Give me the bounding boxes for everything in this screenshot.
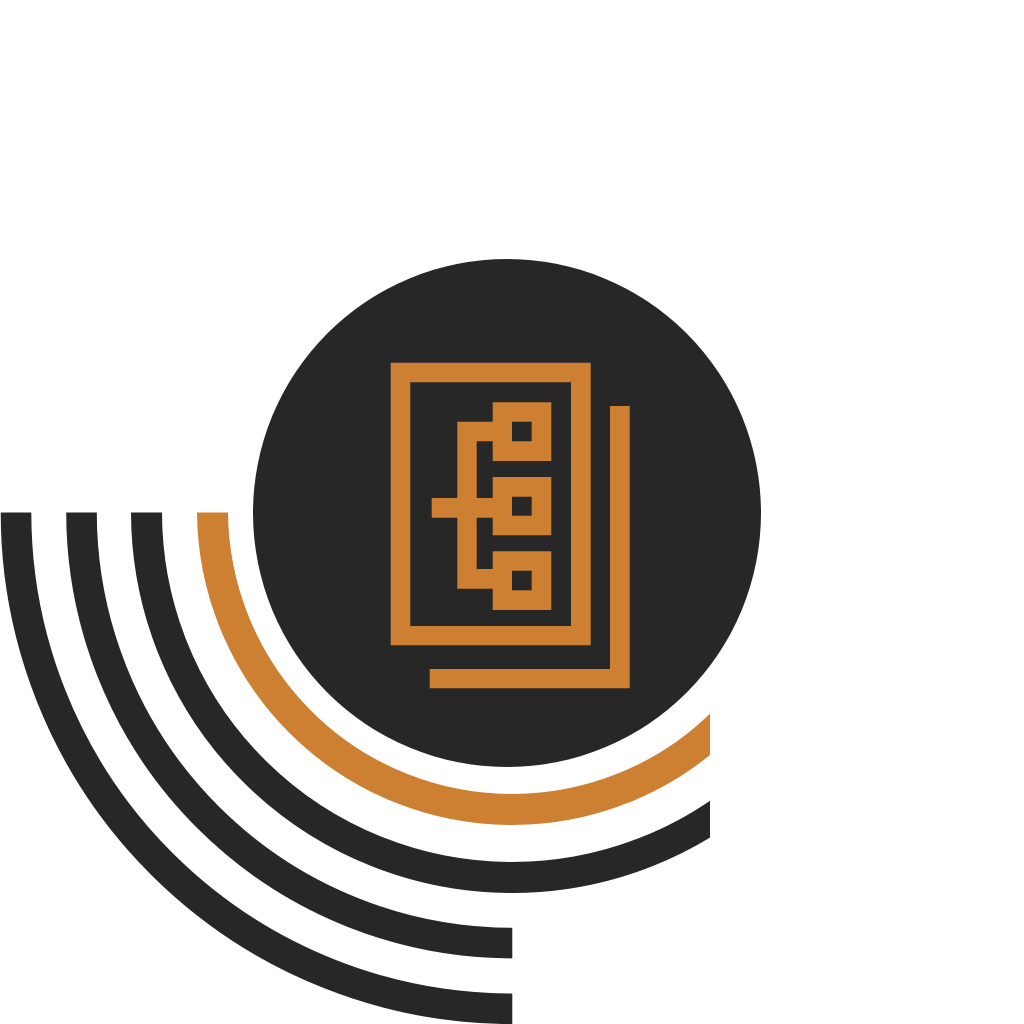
arc: second dark band [66,512,512,958]
arc: outer dark band [0,512,512,1024]
arc: third dark band [131,512,710,893]
icon: tree connector [432,422,500,589]
icon: middle node [493,477,551,535]
infographic [0,259,761,1024]
icon: document frame [391,363,591,645]
dark circle [253,259,761,767]
icon: top node [493,402,551,461]
arc: orange band [197,512,710,825]
icon: document hierarchy [391,363,630,688]
icon: bottom node [493,551,551,610]
icon: back page corner [430,406,630,688]
